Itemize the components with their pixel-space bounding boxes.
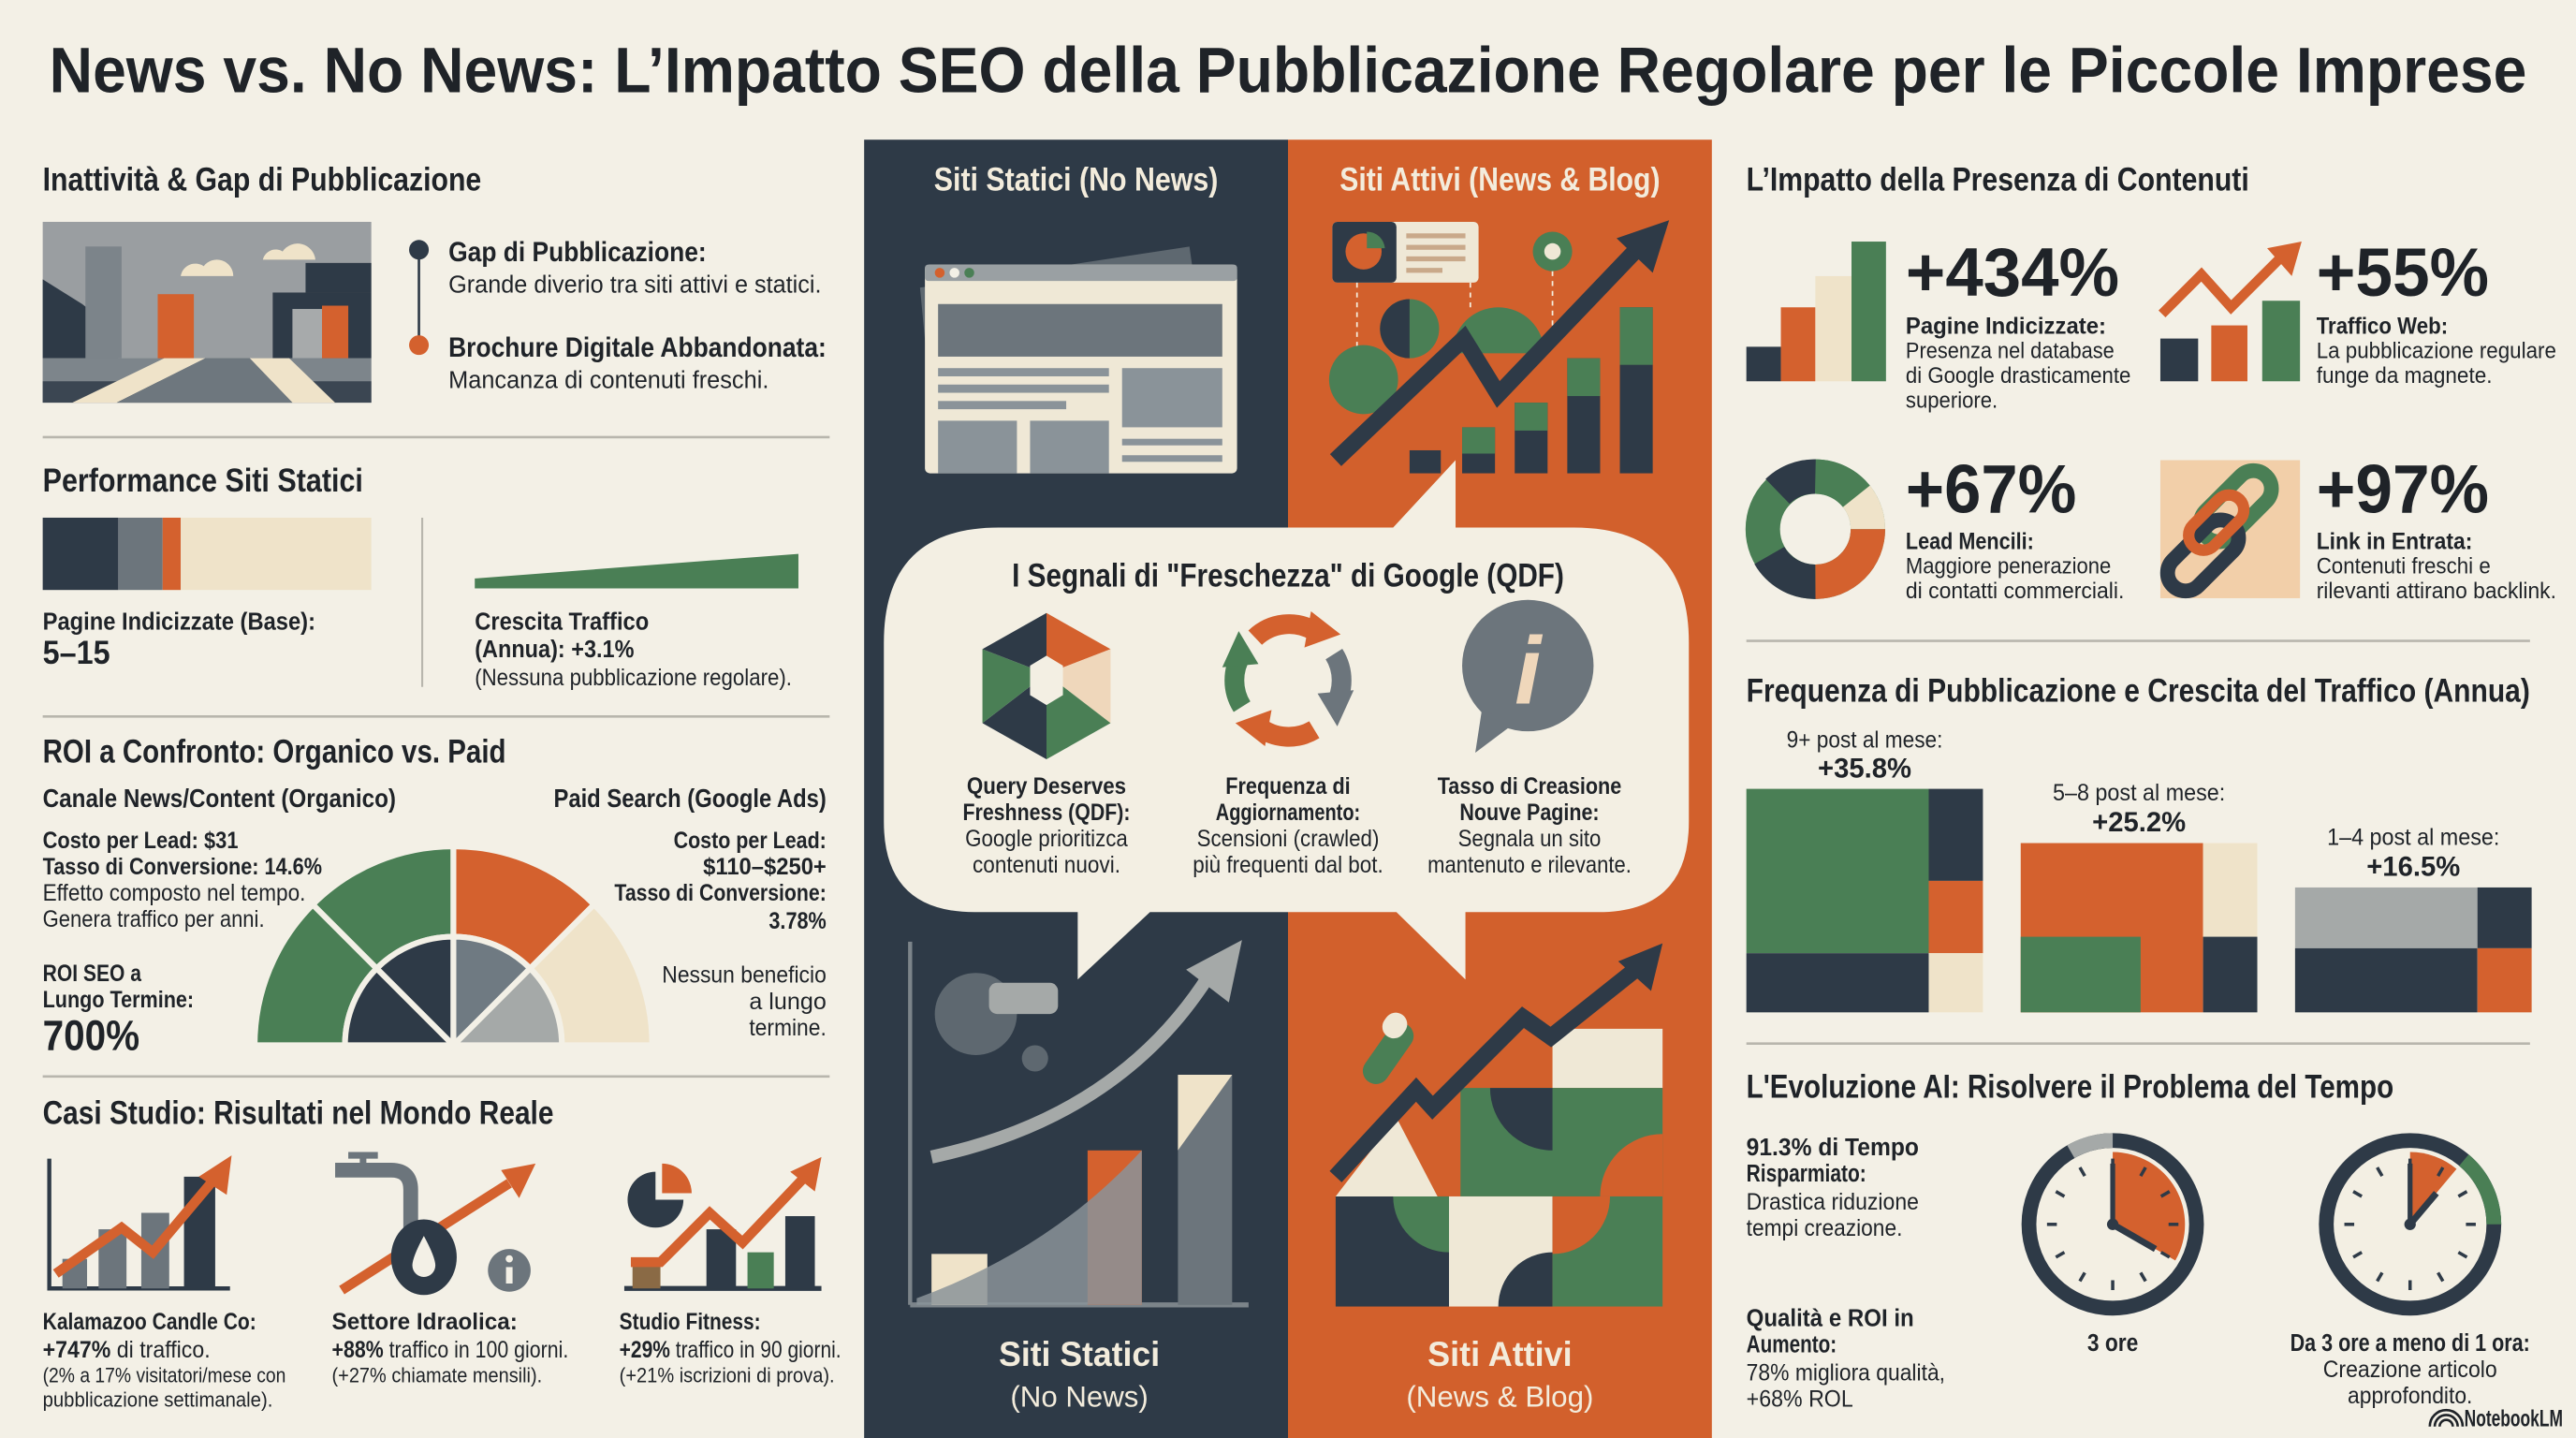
block: 5-8 post: +25.2%	[2092, 807, 2186, 838]
illustration: abandoned street	[43, 222, 372, 403]
heading: impatto: L’Impatto della Presenza di Contenuti	[1747, 162, 2249, 198]
heading: performance: Performance Siti Statici	[43, 462, 363, 499]
stat: +434%: Presenza nel database	[1906, 340, 2115, 364]
stat: +55%: +55%	[2317, 233, 2489, 311]
text: siti statici bottom: Siti Statici	[999, 1335, 1160, 1373]
text: tempo risparmiato: tempi creazione.	[1747, 1216, 1902, 1241]
text: tempo risparmiato	[1747, 1133, 1919, 1241]
stat: +434%: superiore.	[1906, 389, 1998, 413]
text: organico: Canale News/Content (Organico)	[43, 784, 396, 813]
icon: info speech bubble	[1462, 600, 1593, 753]
text: idraulica: (+27% chiamate mensili).	[332, 1363, 542, 1387]
text: QDF: Query Deserves	[967, 774, 1126, 800]
panel: performance siti statici	[43, 462, 798, 691]
text: fitness: +29% traffico in 90 giorni.	[620, 1338, 842, 1363]
text: tempo risparmiato: Drastica riduzione	[1747, 1190, 1919, 1215]
text: da 3 ore a meno di 1 ora: Da 3 ore a meno di 1 ora:	[2291, 1328, 2530, 1357]
text: tasso creazione: Tasso di Creasione	[1438, 774, 1621, 800]
illustration: static browser	[920, 246, 1237, 474]
text: qualità e ROI: Qualità e ROI in	[1747, 1304, 1914, 1332]
heading: siti statici: Siti Statici (No News)	[934, 162, 1218, 198]
illustration: active mosaic	[1336, 944, 1662, 1307]
text: paid: a lungo	[749, 990, 827, 1015]
text: tasso creazione: mantenuto e rilevante.	[1427, 853, 1632, 878]
panel: impatto contenuti	[1747, 162, 2556, 604]
text: crescita traffico	[475, 607, 792, 691]
text: pagine base: Pagine Indicizzate (Base):	[43, 607, 315, 635]
logo: NotebookLM	[2430, 1407, 2563, 1432]
text: tempo risparmiato: Risparmiato:	[1747, 1159, 1866, 1187]
block: 9+ post: 9+ post al mese:	[1787, 728, 1942, 754]
stat: +434%: Pagine Indicizzate:	[1906, 314, 2106, 339]
text: tasso creazione: Nouve Pagine:	[1459, 800, 1600, 826]
stat: +67%: Maggiore penerazione	[1906, 555, 2111, 580]
chart: gauge	[255, 846, 652, 1045]
illustration: active growth chart	[1329, 220, 1669, 474]
text: QDF: Google prioritizca	[965, 827, 1128, 852]
text: crescita traffico: Crescita Traffico	[475, 607, 649, 635]
icon: fitness chart	[624, 1157, 822, 1288]
text: QDF	[962, 774, 1131, 878]
block: 9+ post: +35.8%	[1818, 753, 1911, 784]
text: da 3 ore a meno di 1 ora	[2291, 1328, 2530, 1409]
text: organico: Effetto composto nel tempo.	[43, 881, 305, 906]
text: 3 ore: 3 ore	[2087, 1328, 2138, 1357]
text: siti attivi bottom: Siti Attivi	[1427, 1335, 1573, 1373]
block: 1-4 post: 1–4 post al mese:	[2327, 825, 2499, 850]
callout: freshness signals bubble	[884, 461, 1689, 979]
stat: +67%: Lead Mencili:	[1906, 529, 2034, 554]
text: da 3 ore a meno di 1 ora: Creazione articolo	[2323, 1357, 2497, 1383]
stat: +97%: rilevanti attirano backlink.	[2317, 580, 2556, 604]
text: paid: termine.	[749, 1016, 827, 1041]
stat: +97%: Link in Entrata:	[2317, 529, 2472, 554]
timeline	[409, 237, 827, 393]
text: kalamazoo	[43, 1310, 285, 1412]
text: organico: Lungo Termine:	[43, 988, 194, 1013]
text: paid	[553, 784, 827, 1041]
text: organico: ROI SEO a	[43, 961, 141, 987]
heading: QDF: I Segnali di "Freschezza" di Google (QDF)	[1012, 558, 1564, 594]
text: frequenza: Scensioni (crawled)	[1197, 827, 1379, 852]
stat: +67%: +67%	[1906, 450, 2076, 528]
text: siti statici bottom: (No News)	[1010, 1380, 1149, 1414]
text: tasso creazione	[1427, 774, 1632, 878]
panel: central comparison	[864, 139, 1712, 1438]
text: pagine base	[43, 607, 315, 671]
timeline: Gap di Pubblicazione:	[448, 237, 707, 268]
text: paid: Paid Search (Google Ads)	[553, 784, 827, 813]
text: qualità e ROI: Aumento:	[1747, 1330, 1837, 1358]
chart: static slow growth	[910, 940, 1249, 1305]
text: fitness: Studio Fitness:	[620, 1310, 761, 1335]
panel: casi studio	[43, 1095, 842, 1412]
text: kalamazoo: +747% di traffico.	[43, 1338, 211, 1363]
stat: +55%: La pubblicazione regulare	[2317, 340, 2556, 364]
stat: +97%: +97%	[2317, 450, 2489, 528]
timeline: Brochure Digitale Abbandonata:	[448, 332, 827, 363]
stat: +434%: +434%	[1906, 233, 2119, 311]
chart: green traffic wedge	[475, 554, 798, 588]
text: crescita traffico: (Annua): +3.1%	[475, 635, 634, 663]
text: kalamazoo: Kalamazoo Candle Co:	[43, 1310, 256, 1335]
panel: frequenza pubblicazione	[1747, 673, 2532, 1012]
text: da 3 ore a meno di 1 ora: approfondito.	[2348, 1384, 2472, 1409]
stat: +434%	[1747, 233, 2130, 413]
text: organico: Genera traffico per anni.	[43, 907, 265, 932]
stat: +55%: funge da magnete.	[2317, 364, 2492, 389]
stacked bar: pagine indicizzate	[43, 518, 372, 590]
text: organico: Tasso di Conversione: 14.6%	[43, 855, 322, 880]
heading: siti attivi: Siti Attivi (News & Blog)	[1339, 162, 1661, 198]
heading: AI: L'Evoluzione AI: Risolvere il Problema del Tempo	[1747, 1069, 2393, 1106]
text: qualità e ROI: +68% ROL	[1747, 1387, 1853, 1413]
text: tempo risparmiato: 91.3% di Tempo	[1747, 1133, 1919, 1161]
icon: clock 3 ore	[2029, 1140, 2197, 1308]
text: kalamazoo: (2% a 17% visitatori/mese con	[43, 1363, 285, 1387]
block: 1-4 post: +16.5%	[2366, 852, 2460, 883]
text: pagine base: 5–15	[43, 635, 110, 671]
panel: inattività & gap	[43, 162, 827, 403]
icon: kalamazoo chart	[50, 1155, 231, 1288]
text: fitness: (+21% iscrizioni di prova).	[620, 1363, 835, 1387]
stat: +67%: di contatti commerciali.	[1906, 580, 2124, 604]
text: QDF: Freshness (QDF):	[962, 800, 1131, 826]
text: frequenza: più frequenti dal bot.	[1193, 853, 1383, 878]
text: kalamazoo: pubblicazione settimanale).	[43, 1388, 272, 1412]
stat: +97%: Contenuti freschi e	[2317, 555, 2491, 580]
icon: hexagon shutter	[983, 613, 1110, 759]
text: paid: 3.78%	[768, 909, 827, 934]
stat: +434%: di Google drasticamente	[1906, 364, 2130, 389]
text: organico	[43, 784, 396, 1060]
text: QDF: contenuti nuovi.	[973, 853, 1120, 878]
block: 1-4 post	[2295, 825, 2532, 1012]
stat: +55%	[2160, 233, 2556, 389]
heading: casi studio: Casi Studio: Risultati nel Mondo Reale	[43, 1095, 553, 1132]
text: paid: Nessun beneficio	[662, 963, 827, 989]
icon: refresh arrows	[1222, 611, 1354, 746]
icon: clock meno di 1 ora	[2326, 1140, 2494, 1308]
text: organico: 700%	[43, 1012, 139, 1060]
text: idraulica	[332, 1310, 568, 1387]
text: idraulica: Settore Idraolica:	[332, 1310, 518, 1335]
text: frequenza: Aggiornamento:	[1216, 800, 1360, 826]
text: siti statici bottom	[999, 1335, 1160, 1414]
text: tasso creazione: Segnala un sito	[1458, 827, 1601, 852]
block: 9+ post	[1747, 728, 1983, 1012]
text: qualità e ROI: 78% migliora qualità,	[1747, 1361, 1945, 1387]
text: paid: $110–$250+	[703, 855, 827, 880]
panel: evoluzione AI	[1747, 1069, 2530, 1413]
block: 5-8 post: 5–8 post al mese:	[2053, 781, 2225, 806]
text: idraulica: +88% traffico in 100 giorni.	[332, 1338, 568, 1363]
heading: inattività: Inattività & Gap di Pubblicazione	[43, 162, 481, 198]
text: qualità e ROI	[1747, 1304, 1945, 1413]
stat: +55%: Traffico Web:	[2317, 314, 2448, 339]
text: paid: Costo per Lead:	[674, 829, 827, 854]
text: fitness	[620, 1310, 842, 1387]
stat: +67%	[1763, 450, 2124, 604]
text: paid: Tasso di Conversione:	[614, 881, 827, 906]
timeline: Grande diverio tra siti attivi e statici.	[448, 270, 822, 298]
heading: ROI: ROI a Confronto: Organico vs. Paid	[43, 734, 506, 770]
panel: ROI a confronto	[43, 734, 827, 1060]
icon: plumbing	[335, 1155, 535, 1295]
text: siti attivi bottom: (News & Blog)	[1406, 1380, 1593, 1414]
text: organico: Costo per Lead: $31	[43, 829, 238, 854]
text: siti attivi bottom	[1406, 1335, 1593, 1414]
text: frequenza	[1193, 774, 1383, 878]
text: crescita traffico: (Nessuna pubblicazione regolare).	[475, 666, 792, 691]
icon: info speech bubble: i	[1515, 617, 1544, 724]
text: frequenza: Frequenza di	[1225, 774, 1351, 800]
timeline: Mancanza di contenuti freschi.	[448, 365, 768, 393]
block: 5-8 post	[2021, 781, 2258, 1012]
stat: +97%	[2160, 450, 2556, 604]
